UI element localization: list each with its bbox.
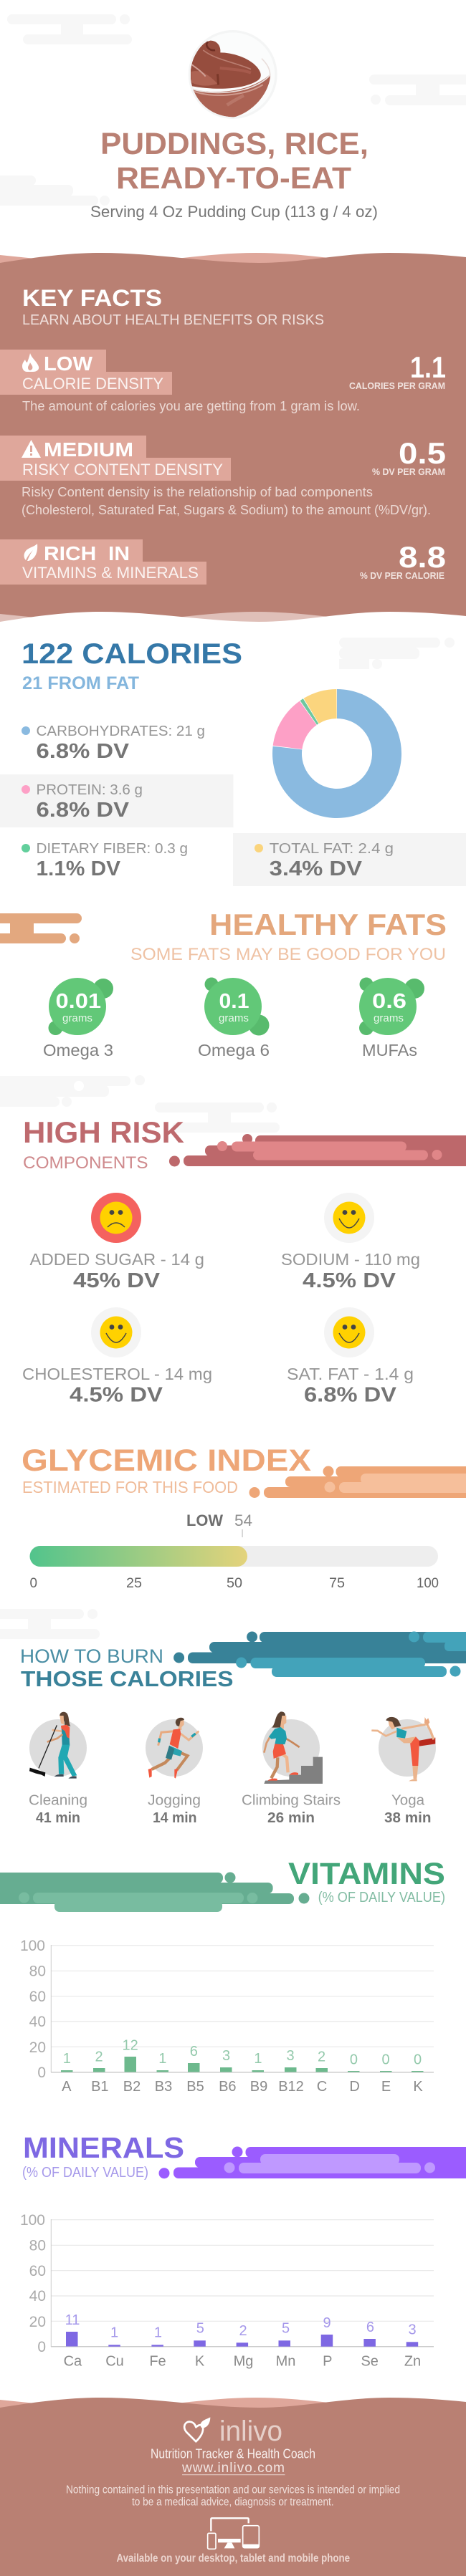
activity: cleaning: 41 min (36, 1810, 80, 1826)
bar chart: vitamins: 40 (29, 2014, 46, 2030)
background cloud: calories burn (0, 1609, 100, 1639)
bar chart: vitamins: A (62, 2079, 72, 2095)
background clouds: header (0, 14, 466, 206)
activity: yoga: 38 min (384, 1810, 432, 1826)
bar chart: vitamins: 2 (318, 2049, 325, 2065)
panel: calories (0, 638, 466, 886)
gauge bar (30, 1546, 438, 1567)
logo: inlivo: inlivo (219, 2416, 282, 2447)
text: availability: Available on your desktop, tablet and mobile phone (116, 2552, 350, 2565)
text: tagline: Nutrition Tracker & Health Coach (151, 2446, 315, 2461)
badge: medium risky content density (0, 436, 231, 481)
item: cholesterol (22, 1307, 212, 1407)
label: low 54: 54 (234, 1512, 252, 1529)
badge: omega 6: Omega 6 (198, 1041, 270, 1059)
bar chart: minerals: 1 (110, 2325, 118, 2341)
activity: cleaning (29, 1712, 87, 1826)
stat: 1.1 calories per gram: 1.1 (410, 350, 446, 384)
badge: omega 6: grams (219, 1012, 249, 1024)
legend: dietary fiber: 1.1% DV (36, 857, 121, 880)
decorative swoosh: glycemic (249, 1466, 466, 1498)
stat: 0.5 percent dv per gram: % DV PER GRAM (372, 466, 445, 477)
panel: healthy fats (0, 908, 447, 1059)
stat: 1.1 calories per gram (349, 350, 446, 391)
badge: low calorie density (0, 350, 172, 395)
bar chart: minerals: 2 (239, 2323, 247, 2339)
stat: 1.1 calories per gram: CALORIES PER GRAM (349, 380, 445, 391)
activity: jogging (146, 1718, 203, 1826)
item: sat fat: SAT. FAT - 1.4 g (287, 1365, 414, 1383)
bar chart: vitamins: 0 (382, 2052, 390, 2068)
bar chart: vitamins: B2 (123, 2079, 141, 2095)
activity: cleaning: Cleaning (29, 1792, 87, 1808)
bar chart: minerals: 5 (196, 2321, 204, 2337)
text: disclaimer: to be a medical advice, diagnosis or treatment. (132, 2496, 334, 2509)
bar chart: minerals: 100 (20, 2212, 45, 2229)
bar chart: minerals: 3 (408, 2322, 417, 2337)
activity: climbing stairs: 26 min (267, 1810, 315, 1826)
badge: mufas: MUFAs (362, 1041, 417, 1059)
icon: person sweeping (29, 1712, 87, 1779)
item: added sugar: 45% DV (73, 1269, 161, 1292)
panel: key facts (0, 253, 466, 634)
badge: omega 3: 0.01 (56, 990, 101, 1013)
subheading: vitamins: (% OF DAILY VALUE) (318, 1890, 445, 1905)
background cloud: calories (339, 638, 455, 669)
bar chart: minerals (20, 2212, 434, 2370)
panel: vitamins (0, 1857, 445, 2095)
heading: high risk: HIGH RISK (23, 1115, 184, 1149)
text: risky content description (22, 485, 431, 517)
decorative swoosh: vitamins (0, 1873, 310, 1912)
heading: 122 calories: 122 CALORIES (22, 638, 242, 670)
item: sodium (281, 1193, 420, 1292)
panel: high risk components (22, 1115, 466, 1407)
heading: vitamins: VITAMINS (288, 1857, 445, 1891)
legend: protein (22, 782, 143, 822)
bar chart: vitamins: B6 (219, 2079, 237, 2095)
bar chart: vitamins (20, 1938, 434, 2095)
donut chart (272, 689, 401, 818)
item: added sugar: ADDED SUGAR - 14 g (30, 1250, 204, 1269)
bar chart: vitamins: 12 (122, 2038, 138, 2054)
bar chart: minerals: Mg (234, 2354, 253, 2370)
label: vitamins and minerals: VITAMINS & MINERALS (22, 564, 199, 582)
subtitle: serving: Serving 4 Oz Pudding Cup (113 g / 4 oz) (90, 203, 378, 221)
label: low: LOW (44, 352, 93, 375)
stat: 8.8 percent dv per calorie: 8.8 (399, 540, 446, 574)
badge: omega 3 (43, 978, 113, 1059)
item: sat fat (287, 1307, 414, 1407)
stat: 8.8 percent dv per calorie: % DV PER CALORIE (360, 570, 444, 581)
legend: protein: 6.8% DV (36, 799, 130, 822)
label: risky content density: RISKY CONTENT DENSITY (22, 461, 223, 479)
stat: 0.5 percent dv per gram (372, 436, 446, 477)
badge: mufas: grams (374, 1012, 404, 1024)
decorative swoosh: healthy fats (0, 913, 82, 943)
title: PUDDINGS, RICE, (100, 127, 368, 161)
item: sodium: 4.5% DV (303, 1269, 396, 1292)
item: sodium: SODIUM - 110 mg (281, 1250, 420, 1269)
badge: omega 6: 0.1 (219, 990, 249, 1013)
icon: warning triangle (22, 440, 41, 458)
activity: yoga (371, 1717, 436, 1826)
gauge scale: 0 (30, 1575, 37, 1591)
legend: total fat (255, 841, 394, 880)
item: sat fat: 6.8% DV (304, 1384, 397, 1407)
icon: devices (208, 2518, 259, 2549)
bar chart: minerals: 6 (366, 2320, 374, 2335)
bar chart: vitamins: D (349, 2079, 360, 2095)
background clouds: high risk (0, 1075, 280, 1133)
stat: 8.8 percent dv per calorie (360, 540, 446, 581)
stat: 0.5 percent dv per gram: 0.5 (399, 436, 446, 470)
bar chart: minerals: 11 (65, 2312, 80, 2328)
bar chart: vitamins: 3 (222, 2048, 230, 2064)
decorative swoosh: high risk (169, 1134, 466, 1166)
heading: minerals: MINERALS (23, 2131, 184, 2164)
badge: mufas (359, 977, 424, 1059)
subheading: 21 from fat: 21 FROM FAT (22, 673, 139, 693)
text: risky content description: (Cholesterol, Saturated Fat, Sugars & Sodium) to the amount (%DV/gr). (22, 503, 431, 517)
text: disclaimer (66, 2484, 400, 2509)
bar chart: vitamins: 60 (29, 1989, 46, 2005)
bar chart: vitamins: B3 (155, 2079, 172, 2095)
panel: minerals (20, 2131, 466, 2370)
decorative swoosh: burn (173, 1632, 466, 1677)
bar chart: vitamins: 0 (350, 2052, 358, 2068)
item: cholesterol: CHOLESTEROL - 14 mg (22, 1365, 212, 1383)
activity: climbing stairs: Climbing Stairs (242, 1792, 341, 1808)
legend: protein: PROTEIN: 3.6 g (36, 782, 143, 798)
bar chart: minerals: 40 (29, 2288, 46, 2305)
legend: total fat: 3.4% DV (270, 857, 363, 880)
badge: omega 3: Omega 3 (43, 1041, 113, 1059)
bar chart: vitamins: B1 (91, 2079, 109, 2095)
bar chart: minerals: 0 (37, 2339, 46, 2355)
text: disclaimer: Nothing contained in this presentation and our services is intended or implied (66, 2484, 400, 2496)
bar chart: vitamins: 6 (190, 2044, 198, 2060)
badge: mufas: 0.6 (372, 990, 406, 1013)
heading: glycemic index: GLYCEMIC INDEX (22, 1443, 311, 1478)
bar chart: minerals: Fe (149, 2354, 166, 2370)
gauge scale: 25 (126, 1575, 142, 1591)
bar chart: vitamins: 0 (414, 2052, 422, 2068)
bar chart: minerals: P (323, 2354, 332, 2370)
panel: footer (0, 2398, 466, 2576)
bar chart: vitamins: 2 (95, 2049, 103, 2065)
label: rich in: RICH IN (44, 542, 130, 564)
bar chart: minerals: 9 (323, 2315, 331, 2331)
bar chart: vitamins: C (317, 2079, 327, 2095)
bar chart: vitamins: 100 (20, 1938, 45, 1954)
activity: jogging: Jogging (148, 1792, 201, 1808)
bar chart: vitamins: 3 (286, 2048, 295, 2064)
bar chart: vitamins: K (413, 2079, 423, 2095)
subheading: minerals: (% OF DAILY VALUE) (22, 2165, 148, 2181)
icon: flame (22, 353, 39, 372)
activity: jogging: 14 min (153, 1810, 196, 1826)
bar chart: minerals: 1 (154, 2325, 162, 2341)
bar chart: minerals: Ca (64, 2354, 82, 2370)
bar chart: minerals: Se (361, 2354, 379, 2370)
text: risky content description: Risky Content density is the relationship of bad components (22, 485, 373, 499)
title (100, 127, 368, 196)
panel: how to burn those calories (20, 1632, 466, 1826)
bar chart: minerals: 60 (29, 2263, 46, 2279)
bar chart: minerals: Cu (105, 2354, 124, 2370)
badge: omega 3: grams (62, 1012, 92, 1024)
icon: leaf (24, 544, 37, 561)
item: cholesterol: 4.5% DV (70, 1384, 163, 1407)
badge: rich in vitamins and minerals (0, 539, 206, 585)
badge: omega 6 (198, 977, 270, 1059)
legend: dietary fiber: DIETARY FIBER: 0.3 g (36, 841, 188, 857)
bar chart: vitamins: B5 (186, 2079, 204, 2095)
activity: climbing stairs (242, 1711, 341, 1826)
panel: glycemic index (22, 1443, 466, 1591)
item: added sugar (30, 1193, 204, 1292)
legend: carbohydrates: 6.8% DV (36, 740, 130, 763)
bar chart: vitamins: 1 (63, 2051, 71, 2067)
legend: carbohydrates (22, 724, 205, 763)
text: calorie density description: The amount of calories you are getting from 1 gram is low. (22, 399, 360, 413)
legend: dietary fiber (22, 841, 188, 880)
label: calorie density: CALORIE DENSITY (22, 375, 163, 393)
bar chart: vitamins: 20 (29, 2039, 46, 2056)
heading: how to burn: HOW TO BURN (20, 1645, 163, 1667)
legend: carbohydrates: CARBOHYDRATES: 21 g (36, 724, 205, 739)
label: medium: MEDIUM (44, 438, 133, 461)
bar chart: vitamins: B9 (250, 2079, 267, 2095)
bar chart: minerals: 5 (282, 2321, 290, 2337)
logo: inlivo (184, 2416, 282, 2447)
link: website: www.inlivo.com (181, 2461, 285, 2476)
label: low 54: LOW (186, 1512, 223, 1529)
bar chart: vitamins: B12 (278, 2079, 304, 2095)
title: READY-TO-EAT (116, 161, 351, 196)
bar chart: minerals: K (195, 2354, 205, 2370)
gauge scale: 50 (227, 1575, 242, 1591)
subheading: healthy fats: SOME FATS MAY BE GOOD FOR YOU (130, 945, 446, 964)
bar chart: minerals: 20 (29, 2314, 46, 2330)
icon: person doing yoga (371, 1717, 436, 1781)
bar chart: minerals: 80 (29, 2238, 46, 2254)
gauge scale (30, 1575, 439, 1591)
bar chart: vitamins: 1 (254, 2051, 262, 2067)
icon: heart with leaf (184, 2417, 210, 2441)
food photo: chocolate pudding bowl (189, 30, 277, 119)
bar chart: vitamins: 0 (37, 2065, 46, 2081)
bar chart: minerals: Zn (404, 2354, 421, 2370)
icon: person jogging (146, 1718, 203, 1779)
heading: key facts: KEY FACTS (22, 285, 162, 311)
bar chart: minerals: Mn (276, 2354, 295, 2370)
subheading: key facts: LEARN ABOUT HEALTH BENEFITS OR RISKS (22, 312, 324, 328)
bar chart: vitamins: 80 (29, 1963, 46, 1980)
label: low 54 (186, 1512, 252, 1537)
legend: total fat: TOTAL FAT: 2.4 g (270, 841, 394, 857)
gauge scale: 100 (417, 1575, 439, 1591)
gauge scale: 75 (329, 1575, 345, 1591)
heading: healthy fats: HEALTHY FATS (209, 908, 447, 941)
subheading: components: COMPONENTS (23, 1153, 148, 1173)
subheading: estimated: ESTIMATED FOR THIS FOOD (22, 1478, 238, 1496)
bar chart: vitamins: E (381, 2079, 391, 2095)
activity: yoga: Yoga (391, 1792, 425, 1808)
icon: person climbing stairs (262, 1711, 323, 1784)
heading: those calories: THOSE CALORIES (21, 1666, 234, 1691)
decorative swoosh: minerals (159, 2146, 466, 2178)
bar chart: vitamins: 1 (158, 2051, 166, 2067)
